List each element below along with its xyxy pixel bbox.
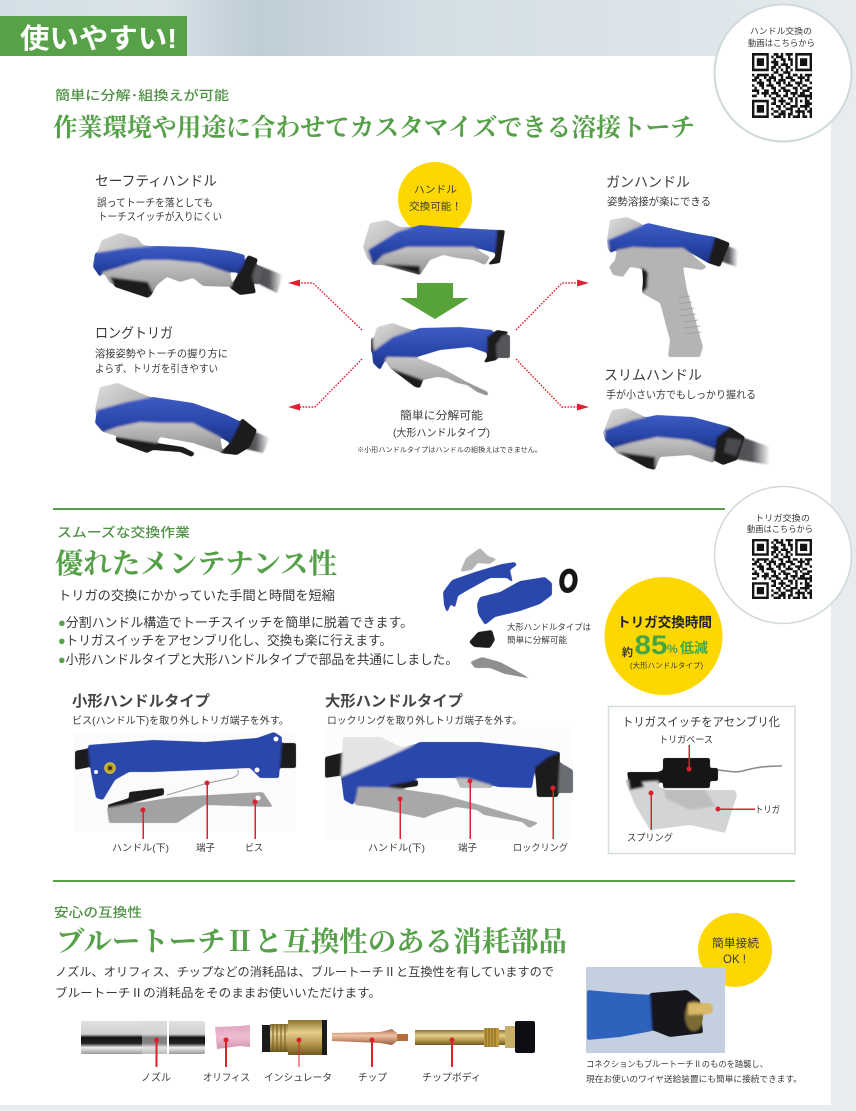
text: easy disassembly caption: (大形ハンドルタイプ) [393,426,490,439]
icon: tip body [415,1021,535,1053]
leader lines: small handle [140,780,258,839]
callout: trigger exchange time 85%: 約 [622,645,633,659]
list: section 2 bullets: ●トリガスイッチをアセンブリ化し、交換も楽に行えます。 [58,633,392,648]
arrow: green down [400,283,469,319]
panel: long trigger [95,325,270,457]
panel: slim handle [603,367,770,470]
callout: trigger exchange time 85% [604,577,722,695]
leader lines: consumables [154,1038,454,1067]
labels: small handle parts: ビス [245,843,263,854]
text: connector caption: 現在お使いのワイヤ送給装置にも簡単に接続できます。 [586,1074,802,1084]
icon: safety handle torch [93,233,283,298]
text: safety handle description: 誤ってトーチを落としても [97,197,213,209]
text: safety handle description: トーチスイッチが入りにくい [98,210,222,223]
text: safety handle description [97,197,222,223]
chart: consumable parts row [81,1020,535,1084]
icon: nozzle [81,1021,205,1054]
text: gun handle description: 姿勢溶接が楽にできる [607,195,711,208]
icon: orifice [215,1025,250,1049]
heading: trigger switch assembly: トリガスイッチをアセンブリ化 [622,714,780,729]
panel: gun handle [606,174,738,357]
callout: easy connection OK [698,913,772,987]
text: long trigger description: よらず、トリガを引きやすい [95,362,218,375]
section 2 subheading: スムーズな交換作業 [57,525,190,540]
QR callout: trigger exchange video [714,486,852,624]
text: section 2 lead: トリガの交換にかかっていた手間と時間を短縮 [58,588,335,603]
heading: large handle type: 大形ハンドルタイプ [325,692,463,710]
text: exploded parts note: 簡単に分解可能 [507,635,567,645]
section 1 heading: 作業環境や用途に合わせてカスタマイズできる溶接トーチ [53,108,695,144]
labels: small handle parts: ハンドル(下) [112,843,169,854]
QR callout: trigger exchange video: 動画はこちらから [747,524,813,534]
callout: handle exchangeable [398,162,472,236]
labels: large handle parts: 端子 [458,842,477,854]
list: section 2 bullets: ●小形ハンドルタイプと大形ハンドルタイプで部品を共通にしました。 [58,652,458,667]
divider: section 2 [53,508,725,510]
leader lines: trigger switch [648,745,755,830]
QR callout: handle exchange video [714,4,852,142]
text: long trigger description: 溶接姿勢やトーチの握り方に [95,347,228,360]
icon: assembled torch [363,220,505,275]
icon: long trigger torch [95,383,270,457]
text: connector caption [586,1059,802,1084]
labels: small handle parts [112,842,263,854]
text: large handle instruction: ロックリングを取り外しトリガ端子を外す。 [327,714,522,727]
text: exploded parts note [507,622,591,645]
QR callout: handle exchange video: 動画はこちらから [748,38,815,48]
callout: trigger exchange time 85%: 85 [634,630,668,660]
image: trigger switch [625,758,782,833]
text: section 3 description: ノズル、オリフィス、チップなどの消耗品は、ブルートーチⅡと互換性を有していますので [55,964,554,979]
labels: consumables: ノズル [141,1071,171,1084]
section 2 heading: 優れたメンテナンス性 [55,542,337,582]
image: connector photo [586,967,725,1053]
heading: slim handle: スリムハンドル [604,367,702,383]
section 3 subheading: 安心の互換性 [54,905,142,920]
panel: small handle type [72,693,296,854]
text: small handle instruction: ビス(ハンドル下)を取り外しトリガ端子を外す。 [72,714,289,727]
labels: consumables [141,1071,481,1084]
labels: large handle parts [368,842,568,854]
callout: trigger exchange time 85%: (大形ハンドルタイプ) [630,660,704,670]
section 3 heading: ブルートーチⅡと互換性のある消耗部品 [56,920,567,960]
icon: gun handle torch [607,217,738,357]
heading: safety handle: セーフティハンドル [95,173,217,189]
labels: trigger switch parts [627,735,780,844]
section 1 subheading: 簡単に分解･組換えが可能 [55,88,229,103]
panel: safety handle [93,173,283,298]
image: small handle open [74,732,296,832]
text: slim handle description: 手が小さい方でもしっかり握れる [606,388,756,401]
labels: large handle parts: ハンドル(下) [368,843,425,854]
leader lines: large handle [398,778,556,839]
text: section 3 description [55,964,554,1000]
heading: gun handle: ガンハンドル [606,174,690,190]
arrows: red dotted connectors [288,280,589,410]
callout: easy connection OK: 簡単接続 [712,936,760,950]
panel: large handle type [325,692,573,854]
QR callout: handle exchange video: ハンドル交換の [750,26,812,36]
title tab [0,16,187,56]
text: exploded parts note: 大形ハンドルタイプは [507,622,591,632]
icon: disassembled torch [371,323,510,396]
icon: slim handle torch [603,408,770,470]
callout: trigger exchange time 85%: % [667,642,678,656]
labels: trigger switch parts: トリガベース [659,735,713,746]
icon: insulator [262,1020,327,1055]
QR callout: trigger exchange video: トリガ交換の [755,513,810,523]
labels: consumables: オリフィス [203,1072,250,1084]
heading: small handle type: 小形ハンドルタイプ [72,693,210,710]
title tab: 使いやすい! [20,23,177,54]
labels: small handle parts: 端子 [196,842,215,854]
callout: handle exchangeable: ハンドル [414,185,457,196]
text: easy disassembly caption [357,408,542,454]
list: section 2 bullets: ●分割ハンドル構造でトーチスイッチを簡単に脱着できます。 [58,615,413,630]
icon: tip [332,1029,408,1045]
labels: consumables: インシュレータ [264,1072,332,1084]
callout: trigger exchange time 85%: 低減 [680,640,708,656]
list: section 2 bullets [58,615,458,667]
labels: consumables: チップ [358,1072,387,1084]
panel: trigger switch assembly [608,706,795,854]
callout: easy connection OK: OK ! [723,954,746,966]
text: connector caption: コネクションもブルートーチⅡのものを踏襲し、 [586,1059,768,1069]
heading: long trigger: ロングトリガ [95,325,173,341]
callout: trigger exchange time 85%: トリガ交換時間 [617,614,712,630]
divider: section 3 [53,880,795,882]
labels: consumables: チップボディ [422,1071,481,1084]
labels: trigger switch parts: トリガ [755,805,780,816]
text: section 3 description: ブルートーチⅡの消耗品をそのままお使いいただけます。 [55,985,381,1000]
text: long trigger description [95,347,228,375]
image: large handle open [325,727,573,839]
text: easy disassembly caption: ※小形ハンドルタイプはハンドルの組換えはできません。 [357,445,542,454]
text: easy disassembly caption: 簡単に分解可能 [400,408,483,422]
labels: trigger switch parts: スプリング [627,832,673,844]
callout: handle exchangeable: 交換可能！ [409,200,462,213]
icon: exploded handle parts [443,548,575,680]
header strip [0,0,856,56]
labels: large handle parts: ロックリング [513,842,568,854]
